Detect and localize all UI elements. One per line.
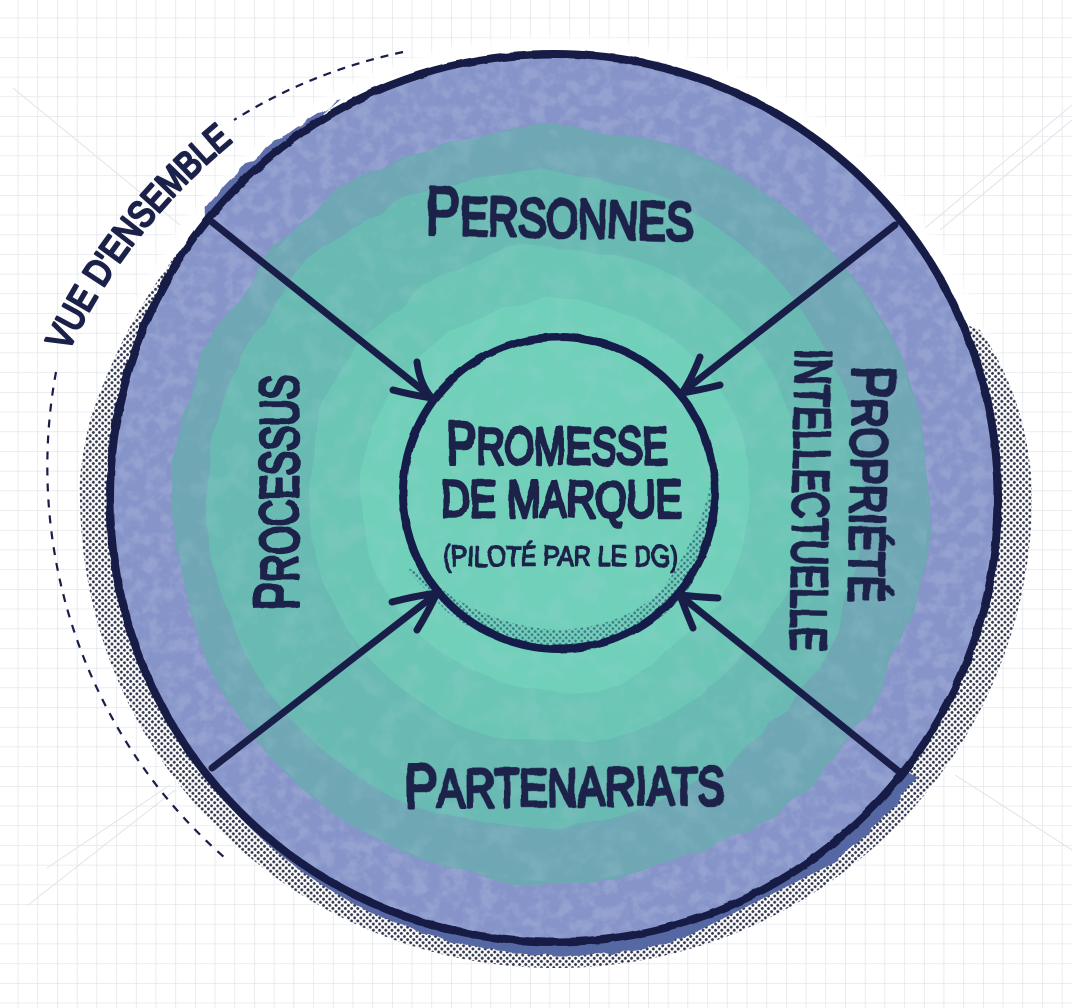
blue outer wash — [103, 47, 1008, 955]
dashed arc: left — [47, 372, 225, 858]
heading: propriété: PROPRIÉTÉ — [836, 366, 907, 603]
arrow: processus to centre — [212, 593, 437, 768]
halftone drop shadow — [80, 212, 1032, 968]
centre title: (PILOTÉ PAR LE DG) — [443, 540, 678, 573]
dashed arc: top — [234, 52, 403, 120]
arrow: propriété intellectuelle to centre — [682, 225, 895, 393]
heading: intellectuelle: INTELLECTUELLE — [780, 349, 841, 652]
centre title: DE MARQUE — [441, 471, 682, 529]
centre title — [441, 410, 682, 573]
arrow: partenariats to centre — [680, 595, 897, 770]
green concentric rings — [174, 127, 930, 883]
heading: personnes: PERSONNES — [425, 172, 695, 255]
heading: processus: PROCESSUS — [243, 375, 312, 610]
centre title: PROMESSE — [447, 410, 668, 477]
inner circle halftone shadow — [403, 487, 716, 650]
outer circle outline — [110, 54, 998, 942]
inner circle — [403, 337, 715, 649]
arrow: personnes to centre — [212, 222, 432, 398]
label: vue d'ensemble: VUE D'ENSEMBLE — [44, 122, 234, 346]
heading: partenariats: PARTENARIATS — [404, 749, 725, 822]
